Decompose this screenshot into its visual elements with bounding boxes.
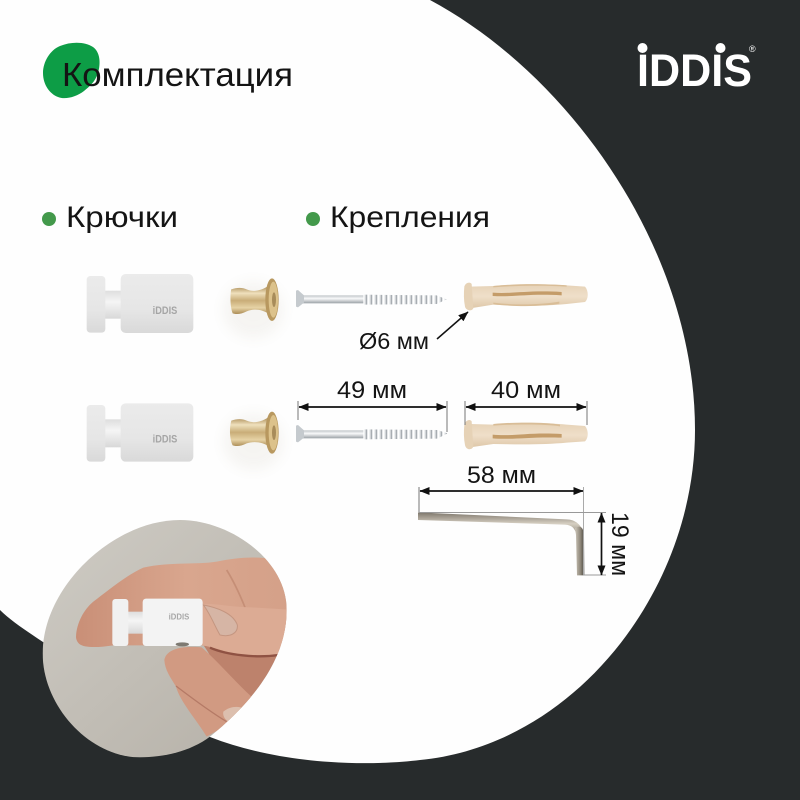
dimension: 40 mm — [465, 377, 587, 425]
brass nut 2 — [230, 412, 279, 454]
hook logo: iDDIS — [169, 611, 190, 621]
dimension: 49 mm: 49 мм — [337, 377, 407, 404]
hook disk — [112, 599, 128, 646]
lower finger — [164, 647, 253, 737]
soft shadows — [223, 282, 283, 470]
heading: Комплектация: Комплектация — [62, 56, 293, 93]
thumb nail — [203, 605, 237, 636]
screw 2 — [296, 425, 448, 442]
section heading: Крючки: Крючки — [66, 201, 178, 234]
dimension: 19 mm: 19 мм — [606, 512, 633, 576]
logo: iDDIS: IDDIS — [637, 45, 752, 96]
knuckle crease — [227, 570, 245, 607]
hook 1 — [87, 274, 193, 333]
arrow to plug — [437, 312, 468, 339]
screw 1 — [296, 290, 447, 307]
hex key — [418, 512, 584, 575]
hook body — [143, 599, 203, 646]
wall plug 1 — [464, 283, 588, 310]
upper hand with finger — [76, 557, 297, 656]
section heading: Крепления: Крепления — [330, 201, 490, 234]
hook 2: iDDIS — [153, 434, 177, 446]
hook neck — [128, 612, 143, 634]
thumb outline — [204, 606, 287, 655]
thumb shadow line — [210, 648, 278, 656]
wall background — [42, 520, 286, 758]
set screw — [176, 642, 189, 646]
logo: iDDIS: ® — [749, 44, 756, 54]
title with green blob — [43, 43, 293, 98]
icon: green blob — [43, 43, 100, 98]
hook 1: iDDIS — [153, 305, 177, 317]
callout: diameter 6 mm — [359, 312, 468, 354]
shadowed palm behind fingers — [204, 646, 280, 720]
hook 2 — [87, 403, 193, 462]
fingernail: lower finger — [223, 707, 243, 721]
hooks and brass nuts — [87, 274, 283, 470]
callout: diameter 6 mm: Ø6 мм — [359, 328, 429, 354]
screws and wall plugs — [296, 283, 588, 449]
dimension: 58 mm: 58 мм — [467, 462, 536, 489]
finger crease — [176, 686, 227, 722]
dimension: 40 mm: 40 мм — [491, 377, 561, 404]
brass nut 1 — [230, 278, 279, 321]
wall plug 2 — [464, 420, 588, 449]
photo: hook held in a hand — [42, 520, 287, 758]
